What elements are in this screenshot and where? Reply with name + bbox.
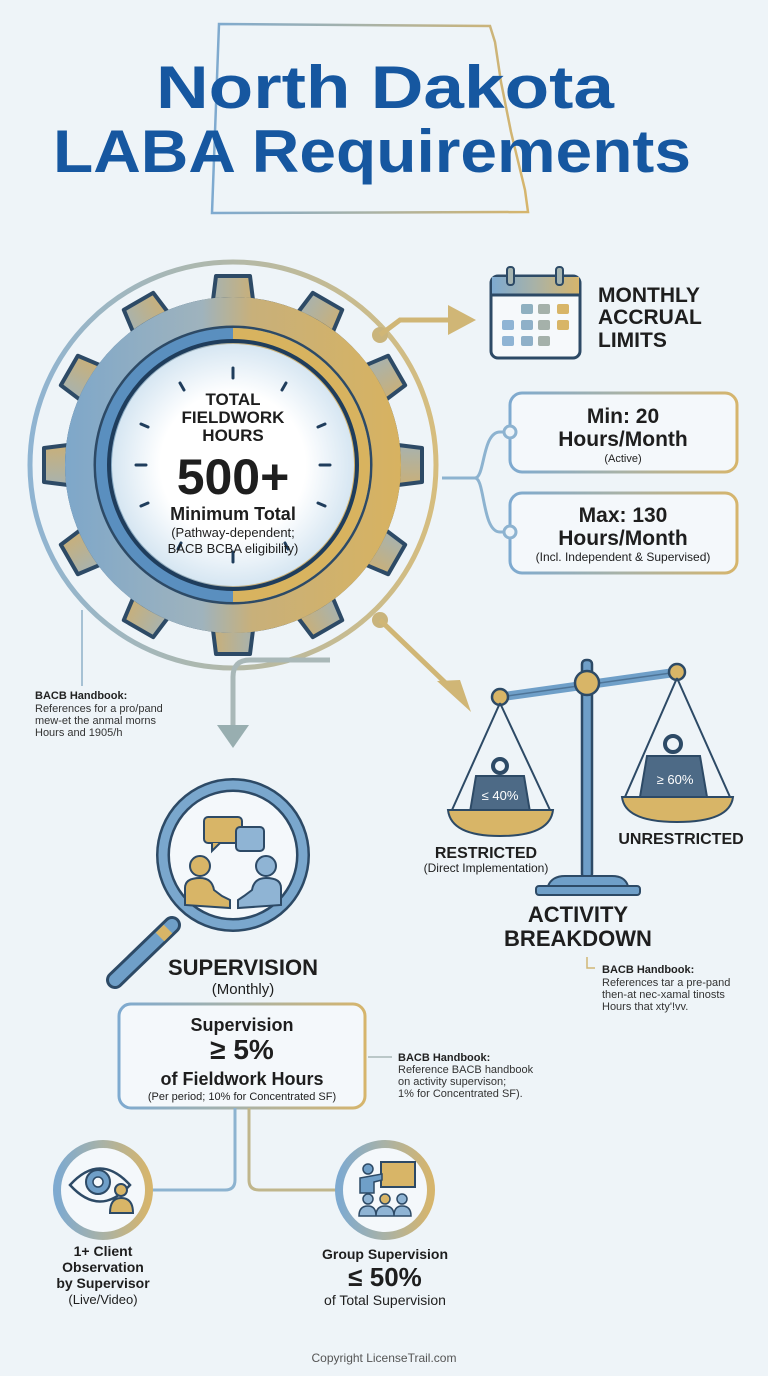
text: client observation bbox=[56, 1243, 150, 1307]
heading: activity breakdown: BREAKDOWN bbox=[504, 926, 652, 951]
heading: monthly accrual limits: ACCRUAL bbox=[598, 306, 702, 329]
gear: total fieldwork hours: Minimum Total bbox=[170, 504, 296, 524]
title bbox=[53, 54, 691, 185]
note: BACB handbook middle: BACB Handbook: bbox=[398, 1052, 490, 1064]
note: BACB handbook right: BACB Handbook: bbox=[602, 964, 694, 976]
box: supervision requirement: of Fieldwork Hours bbox=[160, 1069, 324, 1089]
gear: total fieldwork hours bbox=[44, 276, 422, 654]
title: North Dakota bbox=[156, 54, 615, 121]
connectors: box to bottom circles bbox=[150, 1108, 235, 1190]
box: max hours: Max: 130 bbox=[579, 504, 667, 527]
connector: gear to boxes bbox=[442, 432, 508, 532]
note: BACB handbook middle: Reference BACB handbook bbox=[398, 1064, 534, 1076]
note: BACB handbook left bbox=[35, 610, 163, 739]
arrow: to monthly accrual bbox=[372, 305, 476, 343]
box: supervision requirement: (Per period; 10% for Concentrated SF) bbox=[148, 1091, 336, 1103]
box: min hours: Hours/Month bbox=[558, 428, 688, 451]
box: max hours: Hours/Month bbox=[558, 527, 688, 550]
outer arc ring bbox=[30, 262, 436, 668]
note: BACB handbook right bbox=[587, 957, 730, 1013]
box: max hours bbox=[504, 493, 737, 573]
note: BACB handbook middle bbox=[368, 1052, 534, 1100]
note: BACB handbook left: BACB Handbook: bbox=[35, 690, 127, 702]
box: min hours bbox=[504, 393, 737, 472]
note: BACB handbook right: then-at nec-xamal tinosts bbox=[602, 989, 725, 1001]
weight left: ≤ 40% bbox=[482, 788, 519, 803]
heading: monthly accrual limits bbox=[598, 284, 702, 352]
note: BACB handbook left: Hours and 1905/h bbox=[35, 727, 122, 739]
text: client observation: by Supervisor bbox=[56, 1275, 150, 1291]
arrow: to supervision bbox=[217, 660, 330, 748]
heading: supervision: (Monthly) bbox=[212, 981, 274, 998]
heading: supervision: SUPERVISION bbox=[168, 955, 318, 980]
note: BACB handbook right: Hours that xty'!vv. bbox=[602, 1001, 688, 1013]
box: supervision requirement: ≥ 5% bbox=[210, 1034, 274, 1065]
labels: restricted / unrestricted: (Direct Implementation) bbox=[424, 861, 548, 875]
box: supervision requirement: Supervision bbox=[190, 1015, 294, 1035]
text: client observation: (Live/Video) bbox=[68, 1292, 138, 1307]
labels: restricted / unrestricted bbox=[424, 831, 744, 875]
arrow: to activity breakdown bbox=[372, 612, 471, 712]
heading: supervision bbox=[168, 955, 318, 998]
icon: magnifier with people bbox=[115, 785, 303, 980]
gear: total fieldwork hours: HOURS bbox=[202, 426, 264, 445]
text: client observation: 1+ Client bbox=[74, 1243, 133, 1259]
gear: total fieldwork hours: FIELDWORK bbox=[182, 408, 285, 427]
text: group supervision: Group Supervision bbox=[322, 1246, 448, 1262]
text: group supervision: ≤ 50% bbox=[348, 1262, 422, 1292]
text: group supervision bbox=[322, 1246, 448, 1308]
gear: total fieldwork hours: 500+ bbox=[177, 449, 289, 505]
heading: activity breakdown: ACTIVITY bbox=[528, 902, 628, 927]
weight right bbox=[640, 736, 707, 797]
note: BACB handbook middle: 1% for Concentrated SF). bbox=[398, 1088, 523, 1100]
labels: restricted / unrestricted: UNRESTRICTED bbox=[618, 831, 744, 848]
box: supervision requirement bbox=[119, 1004, 365, 1108]
heading: monthly accrual limits: LIMITS bbox=[598, 329, 667, 352]
box: min hours: Min: 20 bbox=[587, 405, 659, 428]
scale: activity breakdown bbox=[448, 660, 733, 895]
footer: copyright: Copyright LicenseTrail.com bbox=[312, 1351, 456, 1365]
labels: restricted / unrestricted: RESTRICTED bbox=[435, 845, 537, 862]
icon: group supervision bbox=[339, 1144, 431, 1236]
box: min hours: (Active) bbox=[604, 453, 642, 465]
ND state outline bbox=[212, 24, 528, 213]
note: BACB handbook middle: on activity supervison; bbox=[398, 1076, 506, 1088]
heading: activity breakdown bbox=[504, 902, 652, 951]
note: BACB handbook right: References tar a pre-pand bbox=[602, 977, 730, 989]
gear: total fieldwork hours: (Pathway-dependent; bbox=[171, 525, 295, 540]
note: BACB handbook left: References for a pro/pand bbox=[35, 703, 163, 715]
text: client observation: Observation bbox=[62, 1259, 144, 1275]
gear: total fieldwork hours: TOTAL bbox=[205, 390, 261, 409]
box: max hours: (Incl. Independent & Supervised) bbox=[536, 550, 710, 564]
gear: total fieldwork hours: BACB BCBA eligibility) bbox=[168, 541, 298, 556]
title: LABA Requirements bbox=[53, 118, 691, 185]
icon: client observation bbox=[57, 1144, 149, 1236]
icon: calendar bbox=[491, 267, 580, 358]
weight right: ≥ 60% bbox=[657, 772, 694, 787]
note: BACB handbook left: mew-et the anmal morns bbox=[35, 715, 157, 727]
weight left bbox=[470, 759, 530, 812]
heading: monthly accrual limits: MONTHLY bbox=[598, 284, 700, 307]
text: group supervision: of Total Supervision bbox=[324, 1292, 446, 1308]
